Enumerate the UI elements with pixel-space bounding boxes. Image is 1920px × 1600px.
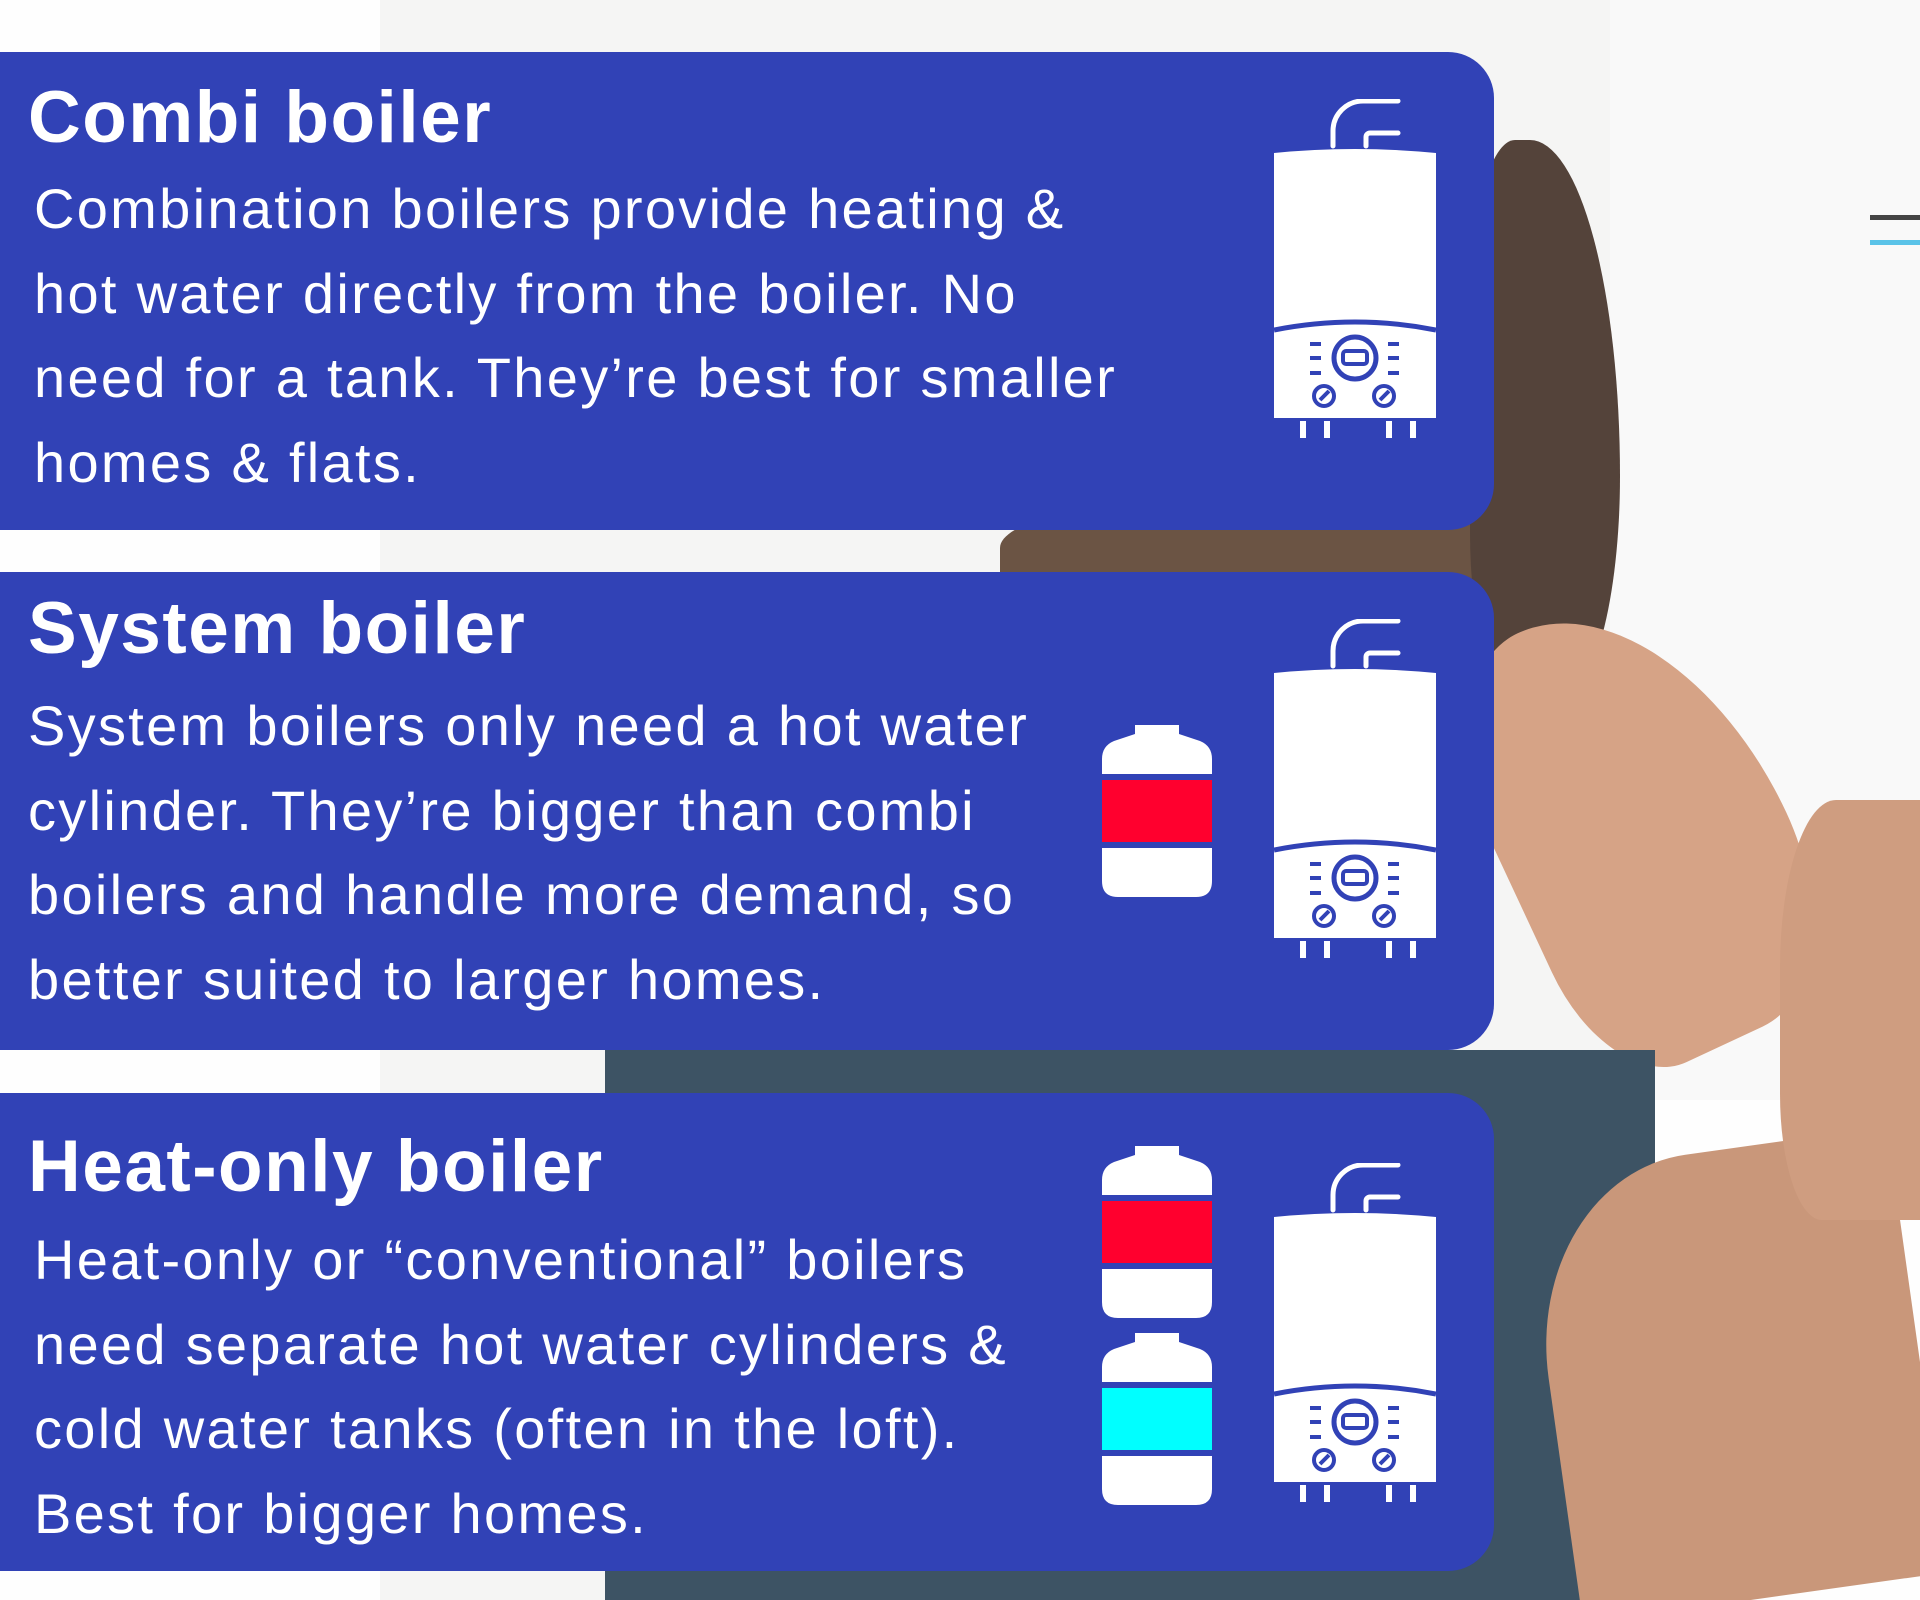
- text: heat-only description: need separate hot water cylinders &: [34, 1312, 1008, 1376]
- icon: hot water cylinder: [1102, 1146, 1212, 1318]
- icon: heat-only boiler: [1274, 1163, 1436, 1502]
- text: heat-only description: Best for bigger homes.: [34, 1482, 648, 1544]
- text: heat-only description: cold water tanks (often in the loft).: [34, 1397, 960, 1460]
- text: heat-only description: Heat-only or “conventional” boilers: [34, 1228, 967, 1291]
- text: system description: boilers and handle more demand, so: [28, 863, 1015, 926]
- title: Heat-only boiler: Heat-only boiler: [28, 1126, 604, 1207]
- title: System boiler: System boiler: [28, 588, 526, 669]
- icon: combi boiler: [1274, 99, 1436, 438]
- panel: system boiler: [0, 572, 1494, 1050]
- text: combi description: hot water directly from the boiler. No: [34, 262, 1018, 324]
- text: system description: better suited to larger homes.: [28, 948, 825, 1010]
- icon: system boiler: [1274, 619, 1436, 958]
- title: Combi boiler: Combi boiler: [28, 77, 492, 158]
- text: system description: cylinder. They’re bigger than combi: [28, 778, 976, 842]
- text: system description: System boilers only need a hot water: [28, 694, 1029, 757]
- text: combi description: [34, 177, 1117, 494]
- panel: combi boiler: [0, 52, 1494, 530]
- text: combi description: Combination boilers provide heating &: [34, 177, 1065, 240]
- text: system description: [28, 694, 1029, 1010]
- text: heat-only description: [34, 1228, 1008, 1544]
- text: combi description: homes & flats.: [34, 430, 421, 494]
- text: combi description: need for a tank. They’re best for smaller: [34, 346, 1117, 409]
- icon: cold water tank: [1102, 1333, 1212, 1505]
- icon: hot water cylinder: [1102, 725, 1212, 897]
- panel: heat-only boiler: [0, 1093, 1494, 1571]
